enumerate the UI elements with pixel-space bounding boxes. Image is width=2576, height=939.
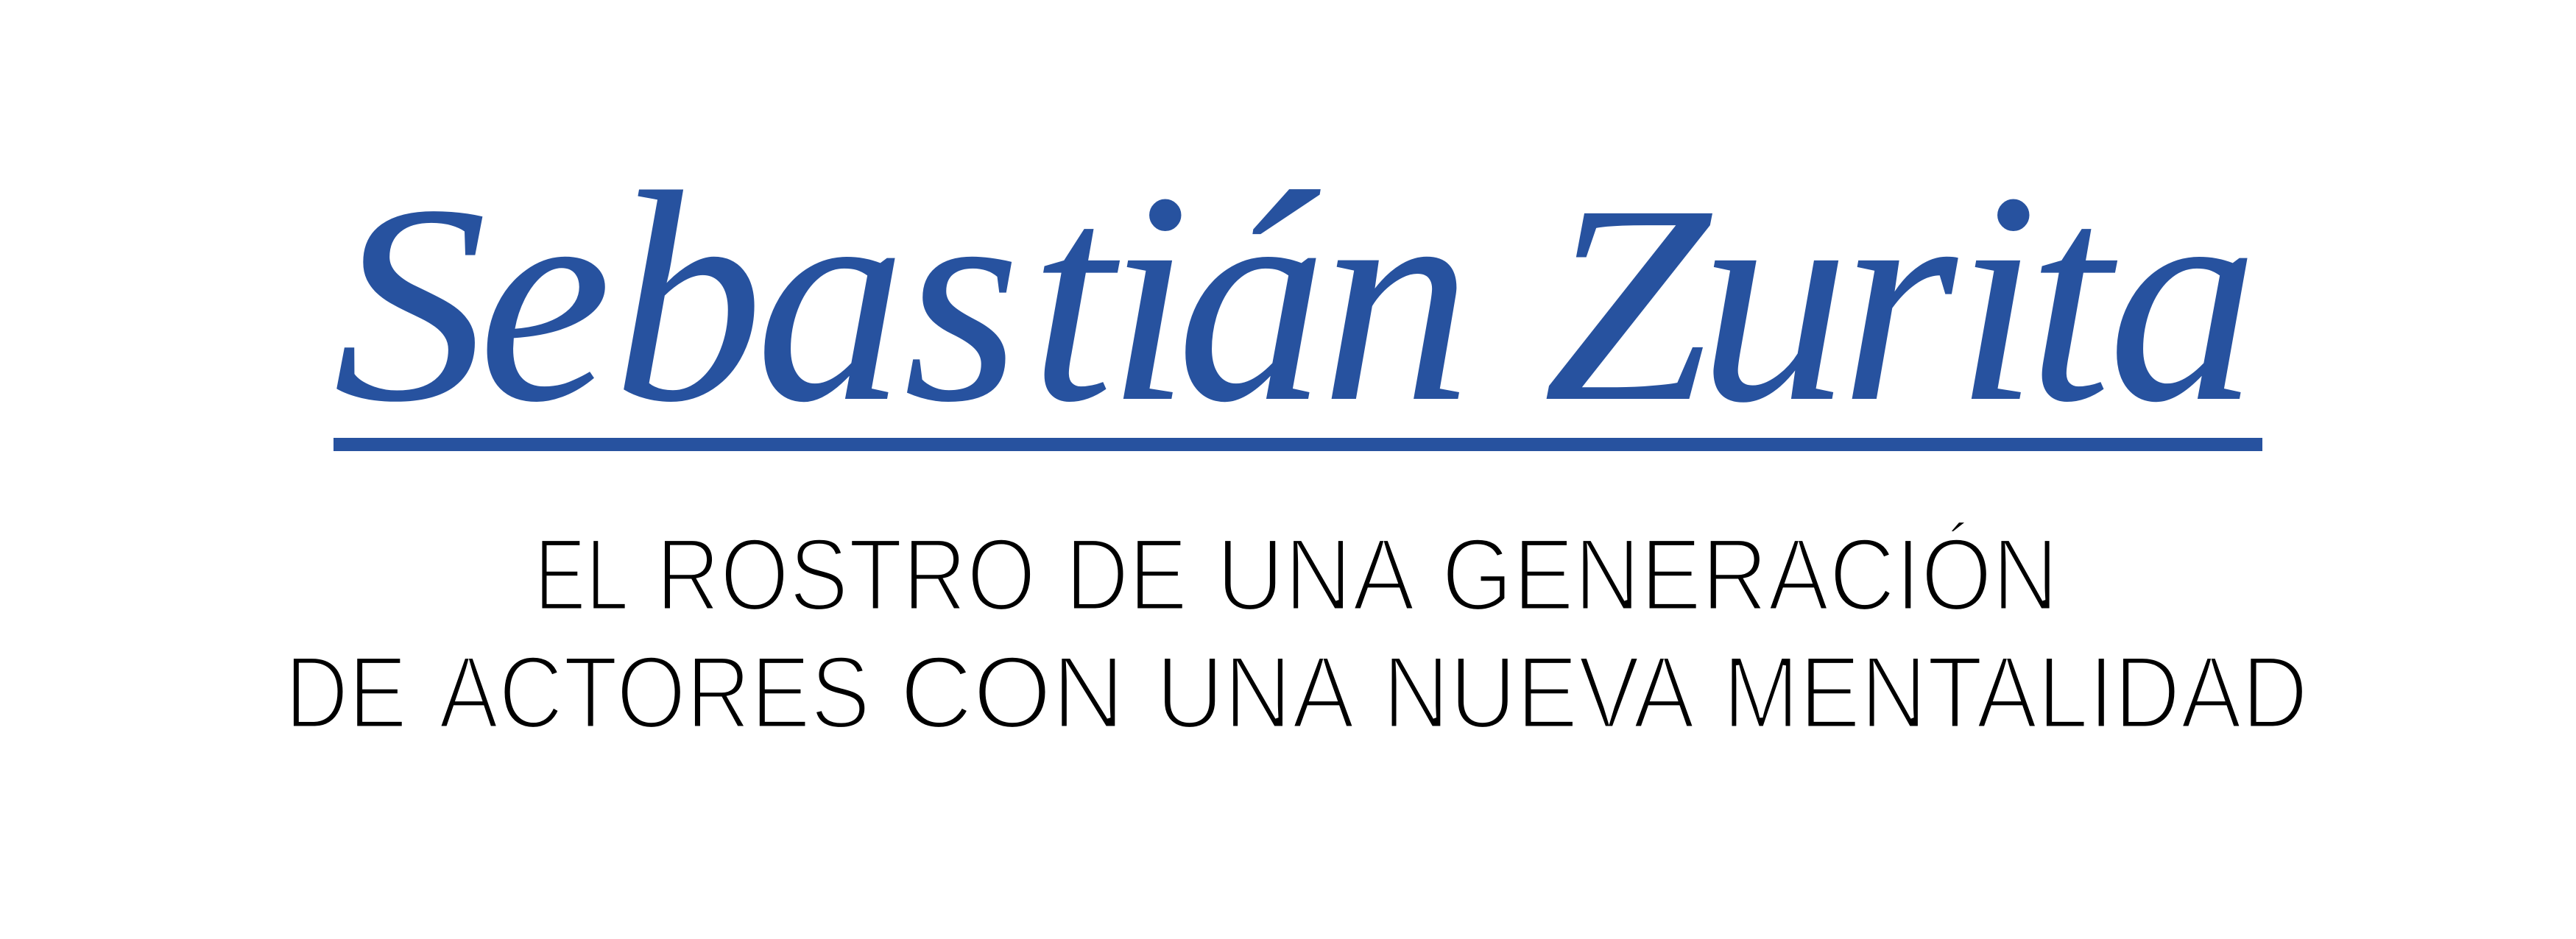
title underline [334,438,2262,451]
subtitle line 1: UNA [1216,517,1416,632]
subtitle line 1: GENERACIÓN [1441,517,2058,632]
subtitle line 1: ROSTRO [656,517,1036,632]
title: S [333,147,487,461]
subtitle line 2: MENTALIDAD [1723,634,2308,750]
subtitle line 1 [534,517,2058,632]
subtitle line 1: DE [1065,517,1188,632]
subtitle line 2: CON [900,634,1125,750]
subtitle line 2: ACTORES [439,634,870,750]
title: urita [1698,130,2259,464]
title: Z [1543,146,1717,460]
subtitle line 2: NUEVA [1383,634,1695,750]
subtitle line 2 [285,634,2308,750]
subtitle line 1: EL [534,517,629,632]
subtitle line 2: UNA [1156,634,1355,750]
title: ebastián [478,130,1472,464]
subtitle line 2: DE [285,634,407,750]
title [333,130,2259,464]
